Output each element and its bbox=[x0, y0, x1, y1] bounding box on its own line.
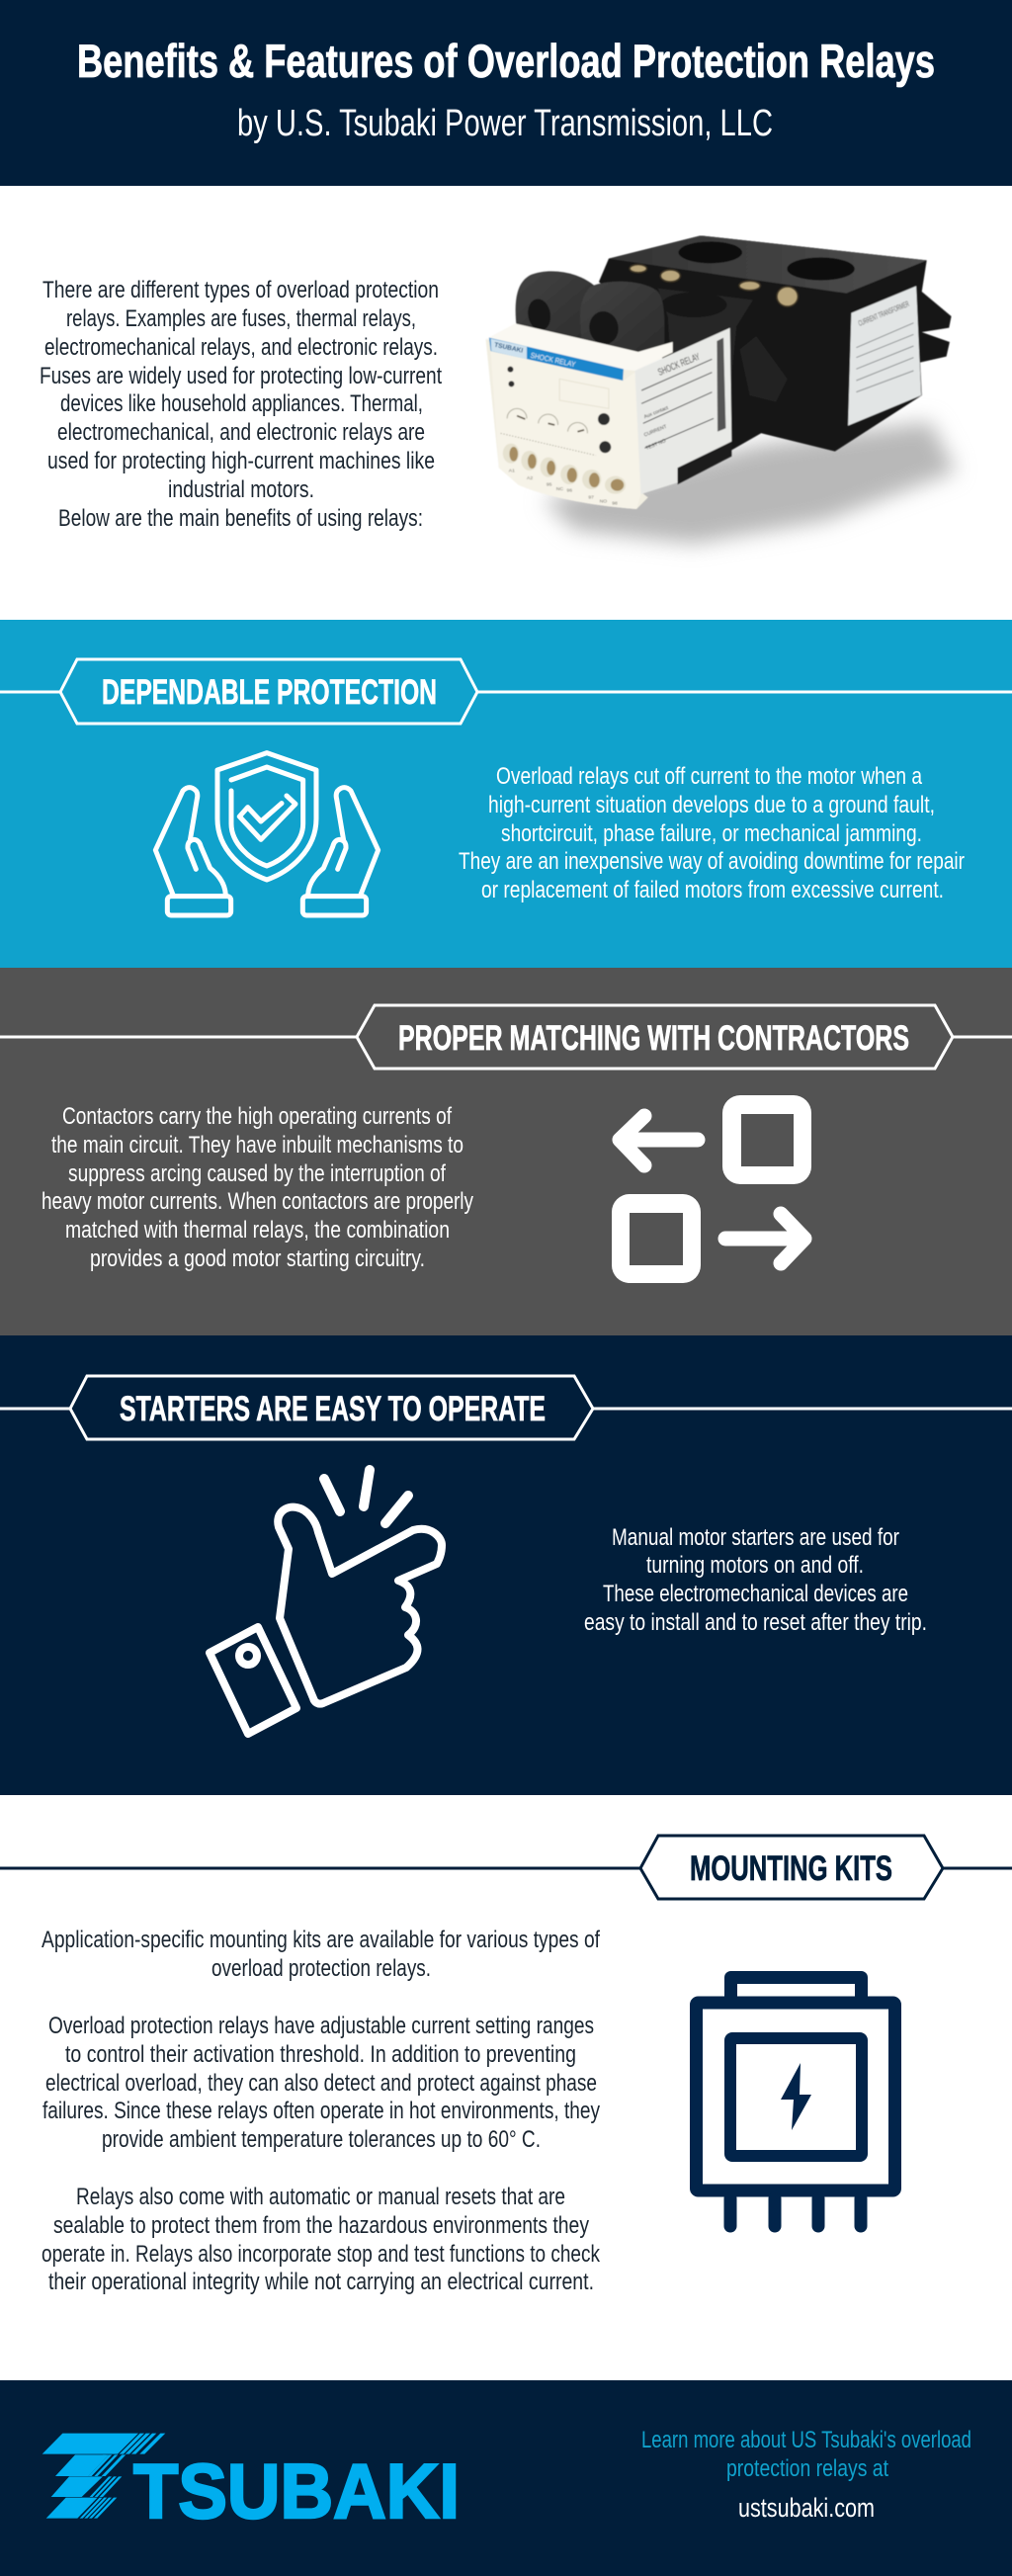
relay side label: TEST NO bbox=[645, 438, 667, 452]
logo wordmark: TSUBAKI bbox=[133, 2447, 460, 2534]
body text: Overload protection relays have adjustable current setting ranges bbox=[48, 2013, 594, 2039]
heading badge: MOUNTING KITS bbox=[690, 1849, 892, 1888]
relay terminal captions: A2 bbox=[527, 475, 533, 481]
body text: These electromechanical devices are bbox=[603, 1581, 908, 1607]
body text: provide ambient temperature tolerances up to 60° C. bbox=[102, 2126, 541, 2153]
ferrite cores bbox=[516, 271, 664, 353]
intro text block: Fuses are widely used for protecting low-current bbox=[40, 363, 442, 389]
intro text block: There are different types of overload protection bbox=[42, 277, 439, 303]
relay indicators bbox=[507, 367, 611, 453]
relay terminal captions: NC bbox=[556, 486, 563, 492]
intro text block: used for protecting high-current machines like bbox=[47, 448, 435, 474]
terminal screws bbox=[630, 265, 798, 306]
relay terminal captions: 97 bbox=[588, 494, 594, 500]
panel: mounting kits bbox=[0, 1795, 1012, 2380]
body text: failures. Since these relays often operate in hot environments, they bbox=[42, 2098, 600, 2124]
icon: swap arrows bbox=[612, 1095, 811, 1283]
body text: provides a good motor starting circuitry. bbox=[90, 1245, 425, 1272]
body text bbox=[459, 763, 965, 903]
intro text block: electromechanical relays, and electronic relays. bbox=[44, 334, 438, 361]
heading badge: STARTERS ARE EASY TO OPERATE bbox=[120, 1390, 546, 1428]
heading badge bbox=[60, 659, 477, 724]
heading badge bbox=[357, 1005, 953, 1069]
body text: matched with thermal relays, the combination bbox=[65, 1217, 450, 1244]
body text bbox=[584, 1524, 927, 1636]
relay terminal captions: 98 bbox=[612, 501, 618, 507]
transformer side label bbox=[848, 286, 921, 426]
body text: sealable to protect them from the hazardous environments they bbox=[53, 2212, 589, 2239]
body text: operate in. Relays also incorporate stop and test functions to check bbox=[42, 2241, 601, 2268]
relay terminal captions: A1 bbox=[509, 468, 515, 473]
relay blue band bbox=[489, 338, 624, 381]
relay dials bbox=[500, 379, 609, 456]
heading badge: DEPENDABLE PROTECTION bbox=[102, 673, 437, 712]
relay side label: SHOCK RELAY bbox=[656, 352, 702, 379]
logo mark bbox=[42, 2434, 165, 2519]
panel: dependable protection bbox=[0, 620, 1012, 968]
body text: their operational integrity while not carrying an electrical current. bbox=[48, 2269, 594, 2295]
body text: suppress arcing caused by the interruption of bbox=[68, 1160, 446, 1187]
transformer top face bbox=[609, 235, 927, 294]
body text: easy to install and to reset after they trip. bbox=[584, 1609, 927, 1636]
body text bbox=[42, 1103, 473, 1272]
body text bbox=[42, 1927, 601, 2295]
body text: Application-specific mounting kits are available for various types of bbox=[42, 1927, 600, 1953]
icon: thumbs up bbox=[210, 1470, 442, 1734]
panel: proper matching bbox=[0, 968, 1012, 1335]
website link: ustsubaki.com bbox=[738, 2493, 875, 2523]
body text: Manual motor starters are used for bbox=[612, 1524, 899, 1551]
body text: turning motors on and off. bbox=[646, 1552, 864, 1579]
drop shadow bbox=[544, 422, 957, 544]
call to action bbox=[641, 2427, 971, 2523]
intro text block: electromechanical, and electronic relays are bbox=[57, 419, 425, 446]
body text: heavy motor currents. When contactors are properly bbox=[42, 1188, 473, 1215]
transformer mid recess bbox=[658, 289, 753, 422]
intro text block: industrial motors. bbox=[168, 476, 314, 503]
intro text block bbox=[40, 277, 442, 532]
transformer side label: CURRENT TRANSFORMER bbox=[857, 300, 910, 328]
body text: the main circuit. They have inbuilt mechanisms to bbox=[51, 1132, 464, 1159]
relay terminal captions bbox=[509, 468, 618, 507]
body text: electrical overload, they can also detect and protect against phase bbox=[45, 2070, 597, 2097]
transformer body bbox=[599, 235, 952, 481]
subtitle: by U.S. Tsubaki Power Transmission, LLC bbox=[237, 103, 773, 144]
heading badge bbox=[640, 1836, 943, 1899]
call to action: protection relays at bbox=[726, 2455, 888, 2482]
intro text block: Below are the main benefits of using relays: bbox=[58, 505, 423, 532]
icon: electrical box bbox=[696, 1977, 895, 2226]
relay front face bbox=[486, 323, 673, 509]
product photo: shock relay bbox=[486, 235, 957, 544]
relay terminals bbox=[503, 444, 626, 494]
header panel bbox=[0, 0, 1012, 186]
body text: to control their activation threshold. In addition to preventing bbox=[65, 2041, 576, 2068]
panel: introduction bbox=[0, 186, 1012, 620]
intro text block: relays. Examples are fuses, thermal relays, bbox=[66, 305, 416, 332]
intro text block: devices like household appliances. Thermal, bbox=[60, 390, 423, 417]
body text: overload protection relays. bbox=[211, 1955, 431, 1982]
relay side label bbox=[634, 328, 731, 494]
relay blue band: SHOCK RELAY bbox=[530, 351, 576, 369]
transformer holes bbox=[679, 241, 742, 263]
icon: shield with hands bbox=[155, 753, 379, 915]
logo: Tsubaki bbox=[42, 2434, 460, 2534]
footer panel bbox=[0, 2380, 1012, 2576]
relay assembly bbox=[486, 235, 952, 509]
body text: Contactors carry the high operating currents of bbox=[62, 1103, 452, 1130]
relay side label: Aux contact bbox=[643, 405, 670, 420]
body text: Relays also come with automatic or manual resets that are bbox=[76, 2184, 565, 2210]
panel: starters bbox=[0, 1335, 1012, 1795]
relay side label: CURRENT bbox=[643, 424, 668, 439]
heading badge bbox=[70, 1376, 593, 1439]
relay blue band: TSUBAKI bbox=[493, 342, 524, 355]
relay terminal captions: 96 bbox=[566, 487, 572, 493]
relay terminal captions: NO bbox=[600, 499, 607, 505]
relay terminal captions: 95 bbox=[547, 482, 552, 488]
